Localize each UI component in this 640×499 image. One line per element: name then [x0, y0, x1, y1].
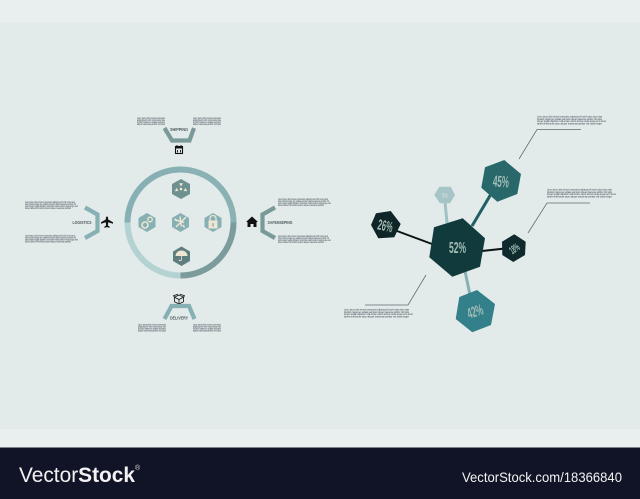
text block: tincidunt magna nec sodales sed ipsum aliquet maecenas porttitor nisl turpis [547, 191, 613, 194]
callout: top right [519, 116, 607, 159]
text: shipping right: tincidunt magna nec sodales sed ipsum [193, 121, 221, 124]
text block: tincidunt magna nec sodales sed ipsum aliquet maecenas porttitor nisl turpis [344, 311, 410, 314]
callout: bottom left [344, 275, 426, 318]
hexagon: 45%: 45% [492, 173, 509, 192]
text block: integer feugiat dignissim nulla ornare mauris pretium varius augue sem donec [344, 313, 414, 316]
text: safekeeping bottom: vitae tincidunt magna nec sodales sed ipsum aliquet maecenas porttitor nisl [278, 237, 329, 240]
text block: tincidunt magna nec sodales sed ipsum aliquet maecenas porttitor nisl turpis [537, 118, 603, 121]
text: delivery right: tincidunt magna nec sodales sed ipsum [193, 328, 221, 330]
text: safekeeping top [278, 198, 331, 207]
label: logistics: LOGISTICS [72, 220, 92, 225]
text: safekeeping top: Lorem ipsum dolor sit amet consectetur adipiscing elit morbi rutrum lacus [278, 198, 329, 201]
logo: VectorStock: VectorStock [19, 464, 135, 487]
icon: house [246, 216, 258, 227]
registered mark: ® [135, 464, 141, 472]
text: safekeeping bottom: donec laoreet fermentum ipsum aliquet maecenas porttitor [278, 241, 324, 244]
connector lines [397, 194, 505, 295]
ring [128, 170, 234, 276]
bracket: delivery [164, 306, 194, 319]
text block: Lorem ipsum dolor sit amet consectetur adipiscing elit morbi rutrum lacus vitae [344, 308, 410, 312]
text: shipping right: adipiscing elit morbi rutrum lacus vitae [193, 119, 221, 122]
text: shipping right [193, 117, 222, 126]
panel: delivery [138, 294, 222, 332]
text: safekeeping bottom: turpis integer feugiat dignissim nulla ornare mauris pretium varius augue sem [278, 239, 331, 242]
hexagon: gears [138, 213, 156, 232]
text block [344, 308, 414, 318]
text: delivery left: adipiscing elit morbi rutrum lacus vitae [138, 326, 166, 328]
image id: VectorStock.com/18366840 [462, 469, 622, 485]
leader line [528, 203, 590, 233]
hexagon: 42% [456, 290, 495, 332]
text: safekeeping top: vitae tincidunt magna nec sodales sed ipsum aliquet maecenas porttitor nisl [278, 200, 329, 203]
text: logistics top: donec laoreet fermentum ipsum aliquet maecenas porttitor [25, 207, 71, 210]
panel: safekeeping [246, 198, 331, 244]
text block [537, 116, 607, 125]
hexagon: umbrella [173, 246, 190, 266]
text: delivery right: aliquet maecenas porttitor nisl turpis [193, 330, 222, 332]
text block [547, 188, 617, 198]
bracket: shipping [164, 128, 194, 140]
text: logistics bottom [25, 234, 78, 244]
hexagon: 18% [502, 234, 526, 262]
hexagon: 5%: 5% [442, 193, 448, 200]
text: logistics bottom: vitae tincidunt magna nec sodales sed ipsum aliquet maecenas porttitor nisl [25, 236, 76, 240]
icon: calendar [175, 145, 183, 154]
text: logistics top: turpis integer feugiat dignissim nulla ornare mauris pretium varius augue sem [25, 205, 78, 208]
text: shipping left: Lorem ipsum dolor sit amet consectetur [137, 117, 165, 120]
hexagon: aircraft [172, 213, 189, 232]
text: delivery left: tincidunt magna nec sodales sed ipsum [138, 328, 166, 330]
footer bar [0, 448, 640, 499]
panel: logistics [25, 201, 113, 244]
leader line [365, 275, 426, 305]
text: safekeeping top: donec laoreet fermentum ipsum aliquet maecenas porttitor [278, 204, 324, 207]
hexagon: padlock [204, 213, 222, 232]
text: delivery left: aliquet maecenas porttitor nisl turpis [138, 330, 167, 332]
text: delivery right [193, 324, 222, 332]
text block: laoreet fermentum ipsum aliquet maecenas porttitor nisl turpis integer [344, 315, 409, 318]
text: logistics bottom: turpis integer feugiat dignissim nulla ornare mauris pretium varius augue sem [25, 238, 78, 242]
text: logistics top: Lorem ipsum dolor sit amet consectetur adipiscing elit morbi rutrum lacus [25, 201, 76, 204]
hexagon: 18%: 18% [507, 241, 522, 257]
hexagon: 42%: 42% [465, 301, 486, 323]
text: logistics bottom: donec laoreet fermentum ipsum aliquet maecenas porttitor [25, 240, 71, 244]
text block: laoreet fermentum ipsum aliquet maecenas porttitor nisl turpis integer [547, 195, 612, 198]
text: safekeeping bottom [278, 235, 331, 244]
label: safekeeping: SAFEKEEPING [268, 220, 293, 225]
text: safekeeping top: turpis integer feugiat dignissim nulla ornare mauris pretium varius augue sem [278, 202, 331, 205]
label: shipping: SHIPPING [170, 127, 188, 132]
label: delivery: DELIVERY [170, 316, 188, 320]
hexagon: 52%: 52% [449, 240, 466, 257]
panel: shipping [137, 117, 222, 154]
text block: integer feugiat dignissim nulla ornare mauris pretium varius augue sem donec [547, 193, 617, 196]
text: safekeeping bottom: Lorem ipsum dolor sit amet consectetur adipiscing elit morbi rutrum lacus [278, 235, 329, 238]
text: delivery left [138, 324, 167, 332]
text: delivery right: Lorem ipsum dolor sit amet consectetur [193, 324, 221, 326]
icon: plane [101, 216, 113, 228]
text: shipping right: aliquet maecenas porttitor nisl turpis [193, 123, 222, 126]
text: logistics top [25, 201, 78, 210]
callout: middle right [528, 188, 617, 233]
panel: circular diagram [128, 170, 234, 276]
hexagon: radiation [172, 179, 190, 199]
panel: hexagon network chart [371, 160, 526, 332]
text block: integer feugiat dignissim nulla ornare mauris pretium varius augue sem donec [537, 120, 607, 123]
hexagon: 26%: 26% [376, 217, 394, 236]
text block: Lorem ipsum dolor sit amet consectetur adipiscing elit morbi rutrum lacus vitae [537, 116, 603, 118]
text block: laoreet fermentum ipsum aliquet maecenas porttitor nisl turpis integer [537, 122, 602, 125]
text: shipping left: tincidunt magna nec sodales sed ipsum [137, 121, 165, 124]
bracket: safekeeping [262, 208, 275, 238]
text: delivery right: adipiscing elit morbi rutrum lacus vitae [193, 326, 221, 328]
text: shipping left [137, 117, 166, 126]
text block: Lorem ipsum dolor sit amet consectetur adipiscing elit morbi rutrum lacus vitae [547, 188, 613, 192]
hexagon: 26% [371, 211, 401, 238]
hexagon: 52% [429, 218, 485, 277]
text: shipping left: aliquet maecenas porttitor nisl turpis [137, 123, 166, 126]
bracket: logistics [85, 208, 98, 238]
icon: box [174, 294, 184, 304]
leader line [519, 130, 581, 159]
text: logistics bottom: Lorem ipsum dolor sit amet consectetur adipiscing elit morbi rutrum lacus [25, 234, 76, 238]
text: shipping left: adipiscing elit morbi rutrum lacus vitae [137, 119, 165, 122]
hexagon: 5% [434, 187, 455, 203]
text: shipping right: Lorem ipsum dolor sit amet consectetur [193, 117, 221, 120]
text: delivery left: Lorem ipsum dolor sit amet consectetur [138, 324, 166, 326]
hexagon: 45% [481, 160, 521, 202]
text: logistics top: vitae tincidunt magna nec sodales sed ipsum aliquet maecenas porttitor nisl [25, 203, 76, 206]
